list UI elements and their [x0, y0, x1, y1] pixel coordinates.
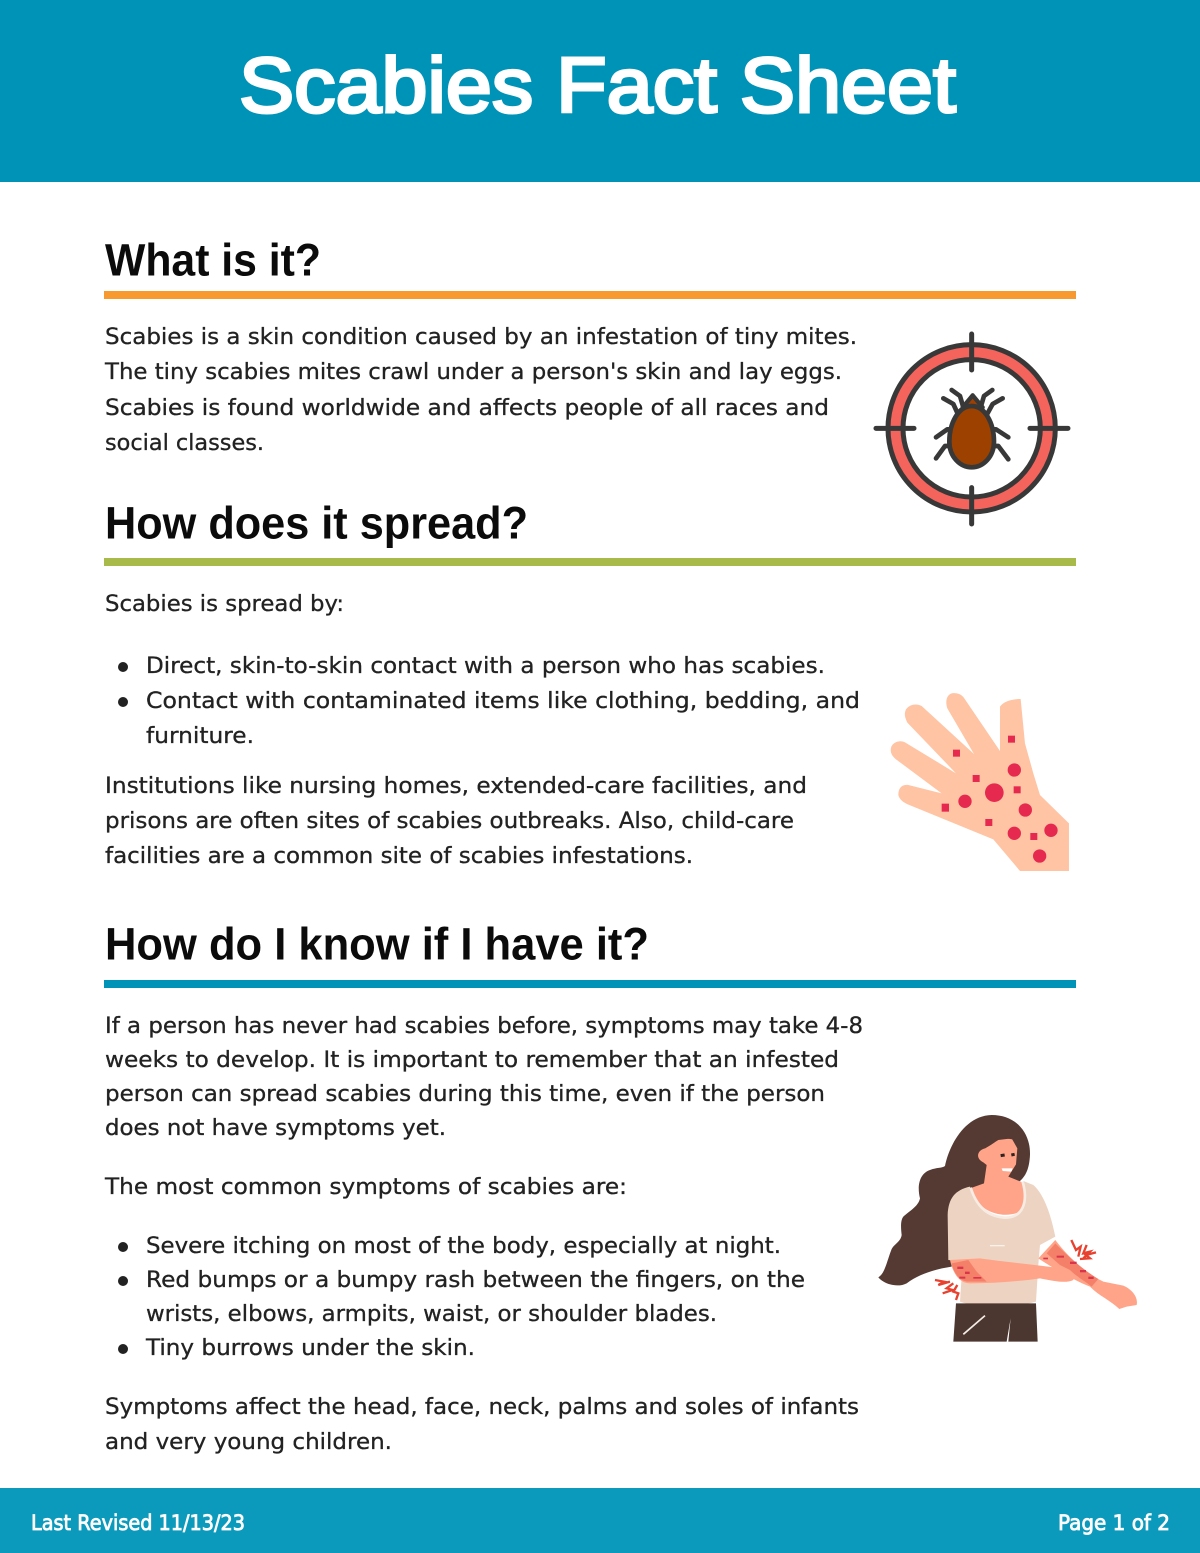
icon: mite in crosshair [876, 334, 1068, 524]
section: how do I know [104, 918, 1137, 1455]
bullet list: symptoms: Red bumps or a bumpy rash between the fingers, on the [146, 1268, 805, 1293]
heading: how does it spread: How does it spread? [105, 498, 528, 548]
green rule [104, 558, 1076, 566]
text block: institutions: Institutions like nursing homes, extended-care facilities, and [105, 774, 807, 799]
text block: incubation [105, 1014, 863, 1141]
text block: definition: social classes. [105, 431, 264, 456]
text block: institutions: facilities are a common site of scabies infestations. [105, 844, 693, 869]
text block: incubation: weeks to develop. It is important to remember that an infested [105, 1048, 839, 1073]
text: spread intro: Scabies is spread by: [105, 592, 344, 617]
text block: incubation: does not have symptoms yet. [105, 1116, 446, 1141]
header banner [0, 0, 1200, 182]
text block: infants [105, 1395, 859, 1455]
bullet list: symptoms: wrists, elbows, armpits, waist, or shoulder blades. [146, 1302, 717, 1327]
illustration: woman scratching rash [878, 1115, 1137, 1342]
footer: page number: Page 1 of 2 [1058, 1511, 1170, 1535]
blue rule [104, 980, 1076, 988]
text block: infants: Symptoms affect the head, face, neck, palms and soles of infants [105, 1395, 859, 1420]
heading: what is it: What is it? [105, 234, 321, 286]
icon: hand with rash [891, 693, 1069, 871]
footer bar [0, 1488, 1200, 1553]
bullet list: spread routes: Contact with contaminated items like clothing, bedding, and [146, 689, 860, 714]
bullet list: spread routes: furniture. [146, 724, 254, 749]
text block: institutions: prisons are often sites of scabies outbreaks. Also, child-care [105, 809, 794, 834]
text block: definition: Scabies is a skin condition caused by an infestation of tiny mites. [105, 325, 857, 350]
text block: incubation: person can spread scabies during this time, even if the person [105, 1082, 825, 1107]
bullet list: symptoms [118, 1234, 805, 1361]
footer: revision date: Last Revised 11/13/23 [31, 1511, 245, 1535]
heading: how do I know: How do I know if I have it? [105, 918, 649, 970]
bullet list: spread routes [118, 654, 860, 749]
section: what is it [104, 234, 1076, 524]
text block: incubation: If a person has never had scabies before, symptoms may take 4-8 [105, 1014, 863, 1039]
bullet list: spread routes: Direct, skin-to-skin contact with a person who has scabies. [146, 654, 825, 679]
text block: definition: The tiny scabies mites crawl under a person's skin and lay eggs. [104, 360, 842, 385]
section: how does it spread [104, 498, 1076, 871]
text block: definition: Scabies is found worldwide and affects people of all races and [105, 396, 829, 421]
text block: infants: and very young children. [105, 1430, 392, 1455]
bullet list: symptoms: Severe itching on most of the body, especially at night. [146, 1234, 781, 1259]
text: symptoms intro: The most common symptoms of scabies are: [104, 1175, 627, 1200]
title: Scabies Fact Sheet [239, 41, 956, 129]
orange rule [104, 291, 1076, 299]
text block: institutions [105, 774, 807, 869]
bullet list: symptoms: Tiny burrows under the skin. [145, 1336, 475, 1361]
text block: definition [104, 325, 857, 456]
